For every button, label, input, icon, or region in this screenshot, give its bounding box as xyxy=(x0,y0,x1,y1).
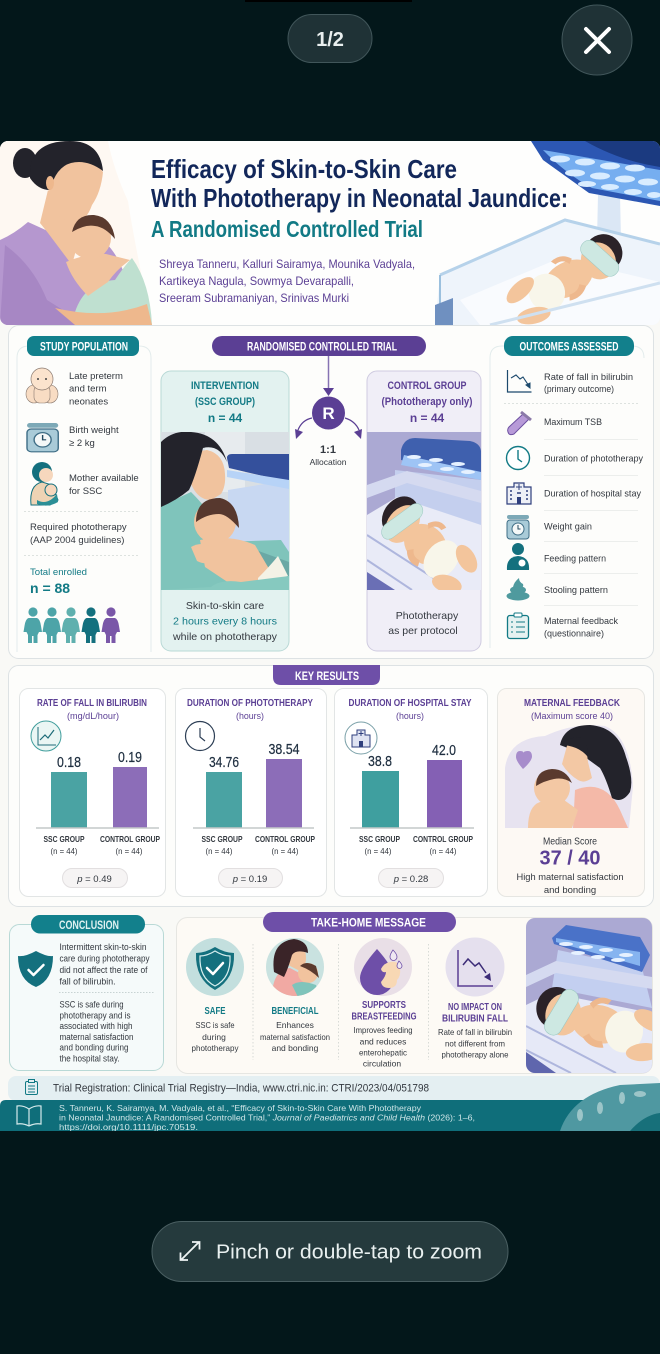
photo: baby under phototherapy xyxy=(367,432,481,590)
item: supports breastfeeding: circulation xyxy=(363,1058,401,1068)
icon: clipboard xyxy=(508,613,528,638)
text: birth weight: Birth weight xyxy=(69,425,119,436)
trial registration strip xyxy=(8,1076,660,1101)
text: mother available: Mother available xyxy=(69,473,139,484)
panel: outcomes assessed xyxy=(490,336,644,648)
axis labels: CONTROL GROUP xyxy=(255,834,315,844)
infographic page background xyxy=(0,141,660,1131)
text: weight gain: Weight gain xyxy=(544,522,592,532)
bar chart: 34.76 xyxy=(209,755,239,771)
citation text: S. Tanneru, K. Sairamya, M. Vadyala, et al., “Efficacy of Skin-to-Skin Care With Phototherapy xyxy=(59,1103,422,1113)
bar chart: 38.8 xyxy=(368,754,392,770)
panel: control group: (Phototherapy only) xyxy=(382,396,473,408)
panel: key results xyxy=(8,665,654,906)
text: required phototherapy xyxy=(30,522,127,546)
text: conclusion: phototherapy and is xyxy=(60,1010,131,1020)
text: total enrolled: n = 88 xyxy=(30,580,70,596)
text: conclusion: the hospital stay. xyxy=(60,1054,120,1064)
text: conclusion xyxy=(59,942,154,1064)
citation text: in Neonatal Jaundice: A Randomised Controlled Trial,” Journal of Paediatrics and Child Health (2026): 1–6, xyxy=(59,1112,475,1122)
item: beneficial: maternal satisfaction xyxy=(260,1032,330,1042)
title xyxy=(151,159,566,237)
banner: key results: KEY RESULTS xyxy=(295,671,359,683)
panel: intervention group: n = 44 xyxy=(208,411,242,425)
p value xyxy=(378,868,444,888)
axis labels: (n = 44) xyxy=(206,846,233,856)
text: late preterm: neonates xyxy=(69,396,108,408)
card: maternal feedback: High maternal satisfaction xyxy=(516,872,624,883)
text: duration of phototherapy: Duration of phototherapy xyxy=(544,454,643,464)
text: feeding pattern: Feeding pattern xyxy=(544,554,606,564)
page counter pill xyxy=(288,14,372,62)
text: late preterm: and term xyxy=(69,384,107,394)
text: allocation xyxy=(310,444,347,467)
axis labels: (n = 44) xyxy=(430,846,457,856)
card: duration of hospital stay: DURATION OF HOSPITAL STAY xyxy=(348,698,472,709)
bar chart: 38.54 xyxy=(268,742,300,758)
p value xyxy=(218,868,282,888)
banner: take-home message xyxy=(263,912,456,932)
illustration: mother holding baby xyxy=(0,141,152,325)
text: late preterm: Late preterm xyxy=(69,371,123,382)
item: no impact on bilirubin fall: Rate of fall in bilirubin xyxy=(438,1027,512,1037)
p value: p = 0.28 xyxy=(393,874,428,885)
authors: Sreeram Subramaniyan, Srinivas Murki xyxy=(159,291,349,305)
text: allocation: 1:1 xyxy=(320,444,336,456)
icon: hospital xyxy=(507,483,531,504)
photo: baby under lamp xyxy=(526,918,660,1073)
text: late preterm xyxy=(69,371,123,408)
item: no impact on bilirubin fall: NO IMPACT ON xyxy=(448,1002,502,1013)
authors: Shreya Tanneru, Kalluri Sairamya, Mounika Vadyala, xyxy=(159,257,415,271)
card: maternal feedback: and bonding xyxy=(544,885,596,896)
text: allocation: Allocation xyxy=(310,457,347,467)
text: required phototherapy: Required phototherapy xyxy=(30,522,127,533)
bar chart: 0.18 xyxy=(57,755,81,771)
panel: intervention group xyxy=(161,371,289,651)
axis labels: CONTROL GROUP xyxy=(100,834,160,844)
panel: study design xyxy=(8,326,654,658)
text: birth weight: ≥ 2 kg xyxy=(69,438,95,449)
p value xyxy=(62,868,128,888)
trial registration strip: Trial Registration: Clinical Trial Registry—India, www.ctri.nic.in: CTRI/2023/04/051798 xyxy=(53,1082,429,1094)
text: conclusion: maternal satisfaction xyxy=(60,1032,134,1042)
icon: expand arrows xyxy=(180,1242,200,1260)
item: no impact on bilirubin fall: not different from xyxy=(445,1038,505,1048)
item: no impact on bilirubin fall xyxy=(438,938,512,1060)
p value: p = 0.19 xyxy=(232,874,267,885)
axis labels xyxy=(44,834,160,856)
icon: clock xyxy=(506,446,530,470)
p value: p = 0.49 xyxy=(76,874,112,885)
photo: skin-to-skin care xyxy=(161,432,289,590)
icon: book xyxy=(17,1106,41,1126)
authors: Kartikeya Nagula, Sowmya Devarapalli, xyxy=(159,274,354,288)
icon: mother and baby xyxy=(31,462,58,506)
item: supports breastfeeding: BREASTFEEDING xyxy=(352,1012,417,1022)
title: Efficacy of Skin-to-Skin Care xyxy=(151,154,457,184)
item: supports breastfeeding: SUPPORTS xyxy=(362,1000,406,1011)
text: conclusion: fall of bilirubin. xyxy=(60,976,116,986)
text: maternal feedback: Maternal feedback xyxy=(544,616,618,627)
card: duration of phototherapy xyxy=(176,688,326,896)
axis labels: (n = 44) xyxy=(272,846,299,856)
text: duration of hospital stay: Duration of hospital stay xyxy=(544,488,641,500)
text: maternal feedback xyxy=(544,616,618,638)
axis labels: SSC GROUP xyxy=(359,834,400,844)
bar chart: 0.19 xyxy=(118,750,142,766)
card: rate of fall in bilirubin: (mg/dL/hour) xyxy=(67,711,119,721)
illustration: mother and baby xyxy=(505,725,633,828)
authors xyxy=(159,257,415,305)
citation footer xyxy=(0,1083,660,1132)
item: safe: during xyxy=(202,1032,226,1042)
item: no impact on bilirubin fall: phototherapy alone xyxy=(442,1050,509,1060)
close button xyxy=(562,5,632,75)
banner: key results xyxy=(273,665,380,685)
text: conclusion: SSC is safe during xyxy=(60,1000,124,1010)
item: beneficial xyxy=(260,938,330,1053)
item: supports breastfeeding: Improves feeding xyxy=(354,1025,413,1035)
text: rate of fall: Rate of fall in bilirubin xyxy=(544,372,633,383)
item: supports breastfeeding: enterohepatic xyxy=(359,1048,408,1058)
item: no impact on bilirubin fall: BILIRUBIN FALL xyxy=(442,1014,508,1024)
card: rate of fall in bilirubin xyxy=(20,688,166,896)
title: A Randomised Controlled Trial xyxy=(151,216,423,242)
bar chart: 42.0 xyxy=(432,743,456,759)
item: safe: SAFE xyxy=(204,1006,226,1017)
panel: take-home message xyxy=(176,912,660,1074)
card: rate of fall in bilirubin: RATE OF FALL IN BILIRUBIN xyxy=(37,698,147,709)
randomisation circle: R xyxy=(322,404,335,423)
panel: control group: as per protocol xyxy=(388,625,458,637)
icon: test tube xyxy=(508,412,531,435)
panel: intervention group: Skin-to-skin care xyxy=(186,600,264,612)
panel: conclusion xyxy=(10,915,164,1070)
page counter pill: 1/2 xyxy=(316,29,344,51)
icon: weighing scale xyxy=(27,423,58,452)
item: supports breastfeeding xyxy=(352,938,417,1068)
icon: falling chart xyxy=(508,370,532,392)
text: maternal feedback: (questionnaire) xyxy=(544,628,604,638)
panel: control group: Phototherapy xyxy=(396,610,459,622)
panel: intervention group: 2 hours every 8 hours xyxy=(173,616,277,628)
banner: randomised controlled trial: RANDOMISED CONTROLLED TRIAL xyxy=(247,342,397,354)
text: conclusion: and bonding during xyxy=(60,1042,128,1052)
axis labels xyxy=(359,834,473,856)
citation text: https://doi.org/10.1111/jpc.70519. xyxy=(59,1122,198,1132)
randomisation circle xyxy=(312,396,345,430)
text: conclusion: associated with high xyxy=(60,1021,132,1031)
card: duration of hospital stay xyxy=(334,688,488,896)
text: rate of fall xyxy=(544,372,633,394)
text: rate of fall: (primary outcome) xyxy=(544,384,614,394)
panel: control group: n = 44 xyxy=(410,411,444,425)
icon: feeding xyxy=(507,543,529,570)
text: mother available: for SSC xyxy=(69,486,102,497)
banner: randomised controlled trial xyxy=(212,336,426,356)
icon: clipboard xyxy=(26,1080,38,1094)
panel: conclusion: CONCLUSION xyxy=(59,918,119,932)
text: total enrolled xyxy=(30,567,87,596)
title: With Phototherapy in Neonatal Jaundice: xyxy=(151,183,568,213)
bar chart xyxy=(36,750,159,828)
text: stooling pattern: Stooling pattern xyxy=(544,585,608,596)
icon: people xyxy=(24,607,120,643)
panel: study population xyxy=(17,336,151,652)
decorative leaf blob xyxy=(560,1083,660,1131)
axis labels: (n = 44) xyxy=(364,846,392,856)
card: maternal feedback: (Maximum score 40) xyxy=(531,711,613,722)
citation text xyxy=(59,1105,474,1131)
arrow: to intervention xyxy=(295,418,312,439)
text: mother available xyxy=(69,473,139,497)
icon: baby xyxy=(26,368,58,403)
card: maternal feedback xyxy=(498,688,644,896)
icon: clock xyxy=(186,722,214,750)
text: total enrolled: Total enrolled xyxy=(30,567,87,578)
zoom hint pill: Pinch or double-tap to zoom xyxy=(216,1242,482,1264)
card: duration of hospital stay: (hours) xyxy=(396,711,424,721)
axis labels: (n = 44) xyxy=(50,846,78,856)
axis labels: CONTROL GROUP xyxy=(413,834,473,844)
header banner xyxy=(0,141,660,335)
text: birth weight xyxy=(69,425,119,449)
arrow: into randomisation xyxy=(323,356,334,396)
item: safe: phototherapy xyxy=(192,1043,239,1053)
panel: control group: CONTROL GROUP xyxy=(388,380,466,392)
axis labels: SSC GROUP xyxy=(44,834,85,844)
bar chart xyxy=(193,742,314,828)
text: conclusion: did not affect the rate of xyxy=(60,965,148,975)
icon: weight scale xyxy=(507,515,529,539)
zoom hint pill xyxy=(152,1222,508,1282)
icon: shield xyxy=(18,951,53,987)
panel: study population: STUDY POPULATION xyxy=(40,342,128,354)
text: conclusion: Intermittent skin-to-skin xyxy=(60,942,146,952)
panel: outcomes assessed: OUTCOMES ASSESSED xyxy=(520,342,618,354)
item: beneficial: and bonding xyxy=(272,1043,319,1053)
item: beneficial: Enhances xyxy=(276,1020,314,1030)
axis labels: (n = 44) xyxy=(116,846,143,856)
panel: control group xyxy=(363,371,489,651)
icon: hospital xyxy=(345,722,377,754)
text: conclusion: care during phototherapy xyxy=(60,954,150,964)
axis labels: SSC GROUP xyxy=(202,834,243,844)
item: supports breastfeeding: and reduces xyxy=(360,1036,406,1046)
axis labels xyxy=(202,834,315,856)
card: maternal feedback: Median Score xyxy=(543,836,597,848)
icon: stool xyxy=(506,578,530,600)
panel: intervention group: while on phototherapy xyxy=(172,631,278,643)
card: duration of phototherapy: (hours) xyxy=(236,711,264,721)
bar chart xyxy=(350,743,474,828)
card: maternal feedback: 37 / 40 xyxy=(540,848,600,870)
panel: intervention group: (SSC GROUP) xyxy=(195,396,255,408)
card: maternal feedback: MATERNAL FEEDBACK xyxy=(524,698,621,709)
illustration: phototherapy lamp and bassinet xyxy=(435,141,660,335)
card: duration of phototherapy: DURATION OF PHOTOTHERAPY xyxy=(187,698,313,709)
text: maximum TSB: Maximum TSB xyxy=(544,417,602,428)
arrow: to control xyxy=(345,418,362,439)
item: beneficial: BENEFICIAL xyxy=(272,1006,318,1017)
item: safe xyxy=(186,938,244,1053)
icon: rising chart xyxy=(31,721,61,751)
text: required phototherapy: (AAP 2004 guidelines) xyxy=(30,535,124,546)
banner: take-home message: TAKE-HOME MESSAGE xyxy=(311,916,426,930)
item: safe: SSC is safe xyxy=(196,1020,235,1030)
panel: intervention group: INTERVENTION xyxy=(191,380,259,392)
